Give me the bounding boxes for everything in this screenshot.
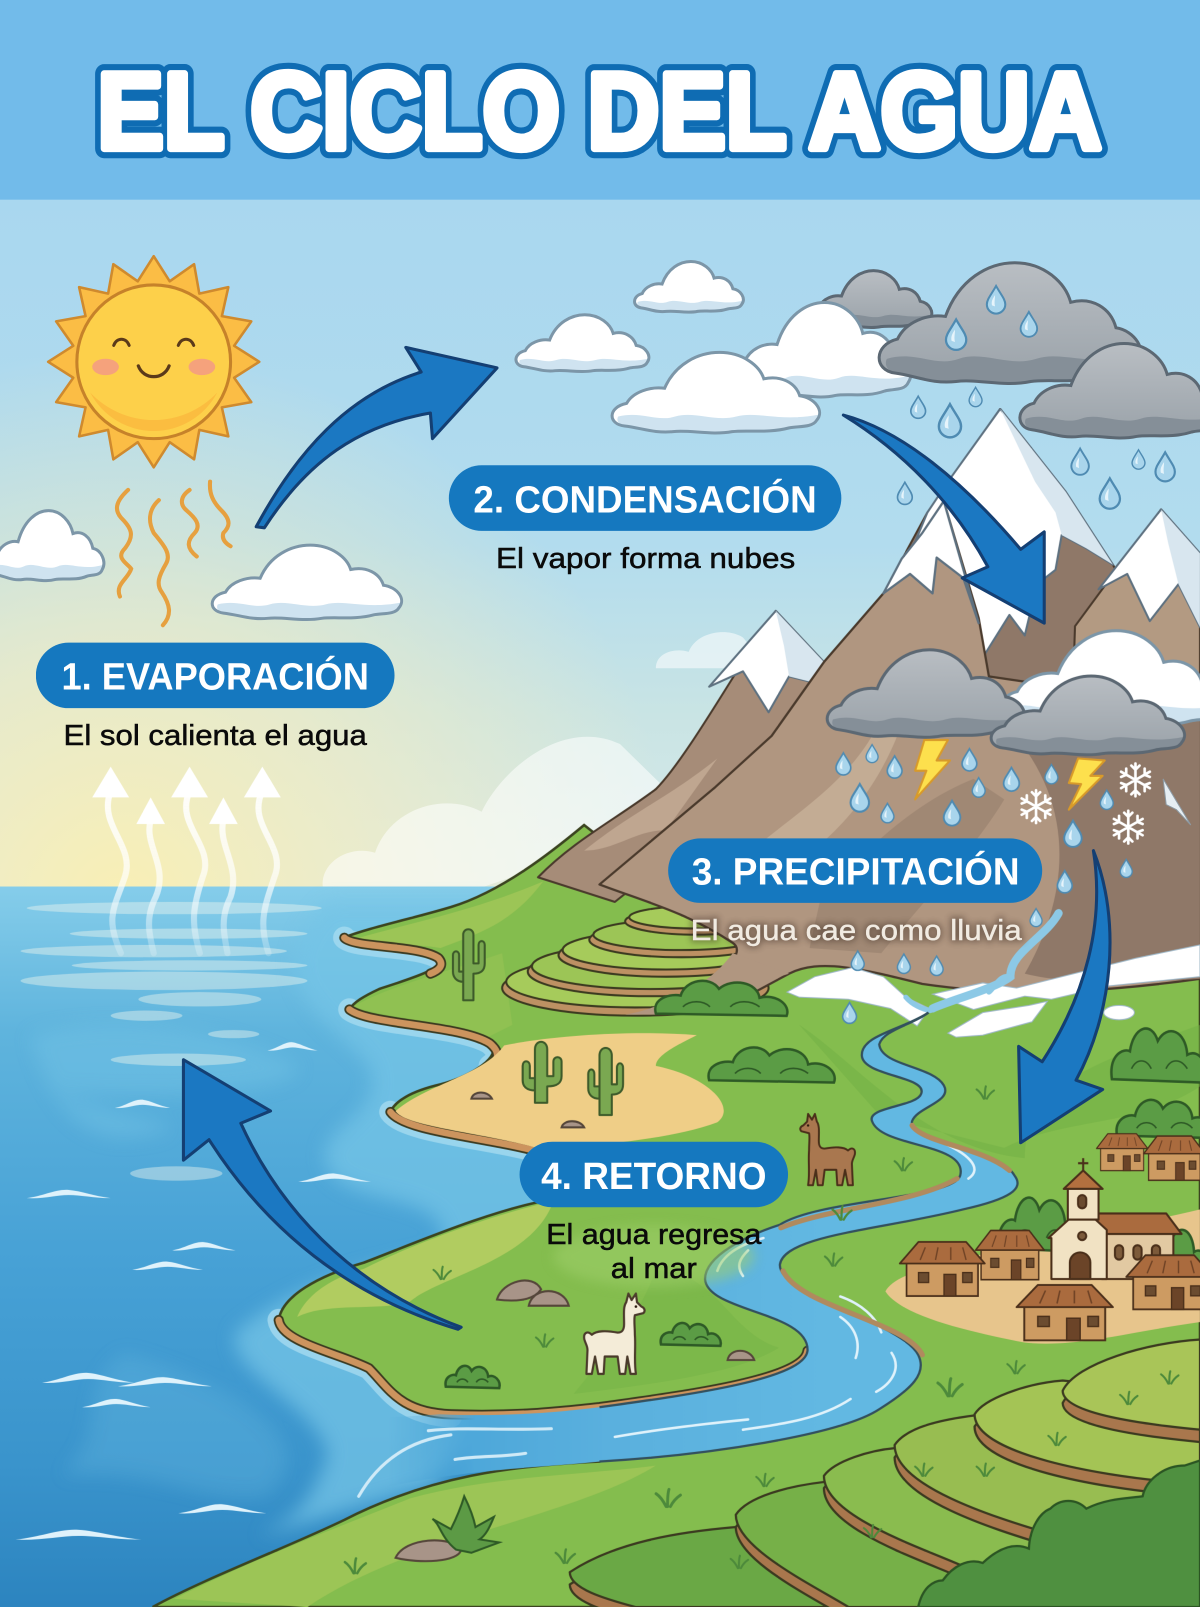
step 1 label: 1. EVAPORACIÓN [61, 655, 369, 699]
snowmelt patches [787, 945, 1200, 1037]
arrow 4 [183, 1060, 461, 1329]
clouds near sun [0, 511, 402, 620]
cacti [453, 929, 623, 1115]
pale horizon clouds [323, 632, 769, 888]
step 4 label: El agua regresa [546, 1219, 761, 1251]
river [359, 1013, 1018, 1496]
step 1 label: El sol calienta el agua [64, 720, 367, 752]
back mountain [820, 409, 1200, 922]
beach edges [279, 938, 808, 1415]
arrow 2 [843, 415, 1044, 623]
grass tufts [345, 1086, 1178, 1573]
header band [0, 0, 1200, 200]
title: EL CICLO DEL AGUA [97, 52, 1102, 173]
step 4 label: al mar [611, 1253, 697, 1285]
coastal light water [31, 902, 574, 1537]
sky [0, 200, 1200, 897]
sea waves [15, 1042, 371, 1540]
village ground [885, 1209, 1200, 1344]
sea [0, 887, 1200, 1607]
hillside under terraces [625, 953, 789, 1015]
right mountain [1066, 509, 1200, 922]
lightning bolts [915, 740, 1105, 810]
heat waves [117, 482, 231, 625]
evaporation foam on sea [20, 902, 322, 1181]
step 2 label: 2. CONDENSACIÓN [473, 477, 817, 521]
arrow 1 [256, 347, 497, 528]
sand area [396, 1033, 724, 1150]
step 3 label: 3. PRECIPITACIÓN [692, 849, 1020, 893]
step 3 label: El agua cae como lluvia [691, 915, 1022, 947]
arrow 3 [1019, 851, 1110, 1143]
front houses [900, 1242, 1200, 1340]
llama brown [800, 1114, 855, 1185]
sun [48, 256, 259, 467]
step 4 label [520, 1142, 788, 1287]
bottom right bushes [918, 1460, 1200, 1607]
river banks [781, 1125, 1009, 1355]
shoreline foam [279, 938, 543, 1416]
step 3 label [668, 838, 1042, 947]
land [153, 825, 1200, 1607]
front mountain [599, 501, 1200, 1009]
church [1048, 1158, 1182, 1279]
upper terraces [502, 906, 774, 1016]
snowflakes [1022, 764, 1150, 843]
land shading patches [174, 881, 1200, 1607]
step 1 label [36, 643, 395, 752]
waterfall [906, 913, 1059, 1011]
rain drops lower [836, 745, 1132, 1023]
houses [976, 1134, 1200, 1280]
step 4 label: 4. RETORNO [541, 1156, 767, 1198]
clouds on mountain [827, 631, 1200, 755]
step 3 label: El agua cae como lluvia [691, 915, 1022, 947]
plant [432, 1496, 499, 1553]
snow streak [1163, 779, 1191, 825]
llama white [584, 1294, 645, 1374]
field bushes [446, 981, 835, 1388]
bottom right terraces [570, 1340, 1200, 1607]
step 2 label [449, 465, 841, 575]
rocks [396, 1093, 754, 1561]
small left mountain [538, 611, 824, 902]
title: EL CICLO DEL AGUA [97, 52, 1102, 173]
step 2 label: El vapor forma nubes [496, 543, 795, 575]
evaporation arrows [92, 767, 281, 953]
bushes behind village [999, 1028, 1200, 1278]
clouds upper [516, 261, 1200, 438]
rain drops upper [897, 286, 1175, 509]
